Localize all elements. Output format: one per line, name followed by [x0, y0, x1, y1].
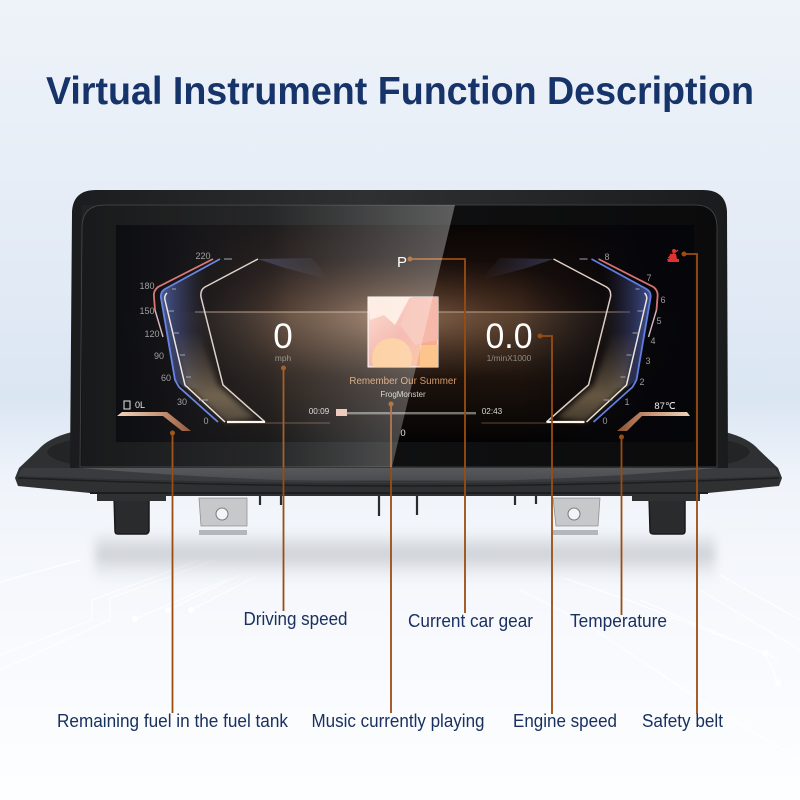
callout line: driving speed — [282, 366, 285, 611]
callout line: engine speed — [538, 334, 552, 714]
rpm scale labels — [602, 252, 666, 426]
callout line: safety belt — [682, 252, 697, 714]
rpm scale labels: 0 — [602, 416, 608, 426]
callout line: fuel — [171, 431, 174, 713]
speed scale labels: 90 — [154, 351, 164, 361]
lower trim — [15, 432, 782, 501]
rpm scale labels: 3 — [645, 356, 651, 366]
instrument screen — [116, 225, 630, 442]
rpm readout: 1/minX1000 — [487, 353, 532, 363]
speed scale labels: 30 — [177, 397, 187, 407]
callout labels: Driving speed — [244, 609, 348, 629]
music counter: 0 — [400, 428, 406, 439]
rpm scale labels: 1 — [624, 397, 630, 407]
speed readout: mph — [275, 353, 291, 363]
rpm scale labels: 8 — [604, 252, 610, 262]
callout labels: Temperature — [570, 611, 667, 631]
music progress bar: 02:43 — [482, 407, 503, 416]
callout line: temperature — [620, 435, 623, 615]
callout line: music — [389, 402, 393, 713]
mounting feet and brackets — [114, 495, 685, 535]
callout line: gear — [408, 257, 465, 613]
music progress bar — [309, 407, 503, 416]
title: Virtual Instrument Function Description — [46, 70, 754, 113]
rpm scale labels: 4 — [650, 336, 656, 346]
callout labels: Music currently playing — [312, 711, 484, 731]
speed scale labels: 220 — [195, 251, 211, 261]
icon: safety belt warning — [667, 249, 679, 262]
display bezel — [70, 190, 728, 468]
rpm readout: 0.0 — [486, 317, 532, 356]
speed readout: 0 — [273, 317, 293, 356]
rpm scale labels: 7 — [646, 273, 652, 283]
rpm scale labels: 2 — [639, 377, 645, 387]
callout labels: Safety belt — [642, 711, 723, 731]
rpm scale labels: 6 — [660, 295, 666, 305]
rpm scale labels: 5 — [656, 316, 662, 326]
album art — [368, 296, 438, 368]
callout labels: Remaining fuel in the fuel tank — [57, 711, 289, 731]
screen glass reflection — [82, 205, 455, 467]
fuel gauge — [117, 400, 191, 431]
speed scale labels: 0 — [203, 416, 209, 426]
music progress bar: 00:09 — [309, 407, 330, 416]
speed scale labels — [139, 251, 211, 426]
callout labels: Current car gear — [408, 611, 533, 631]
speed scale labels: 150 — [139, 306, 155, 316]
callout labels — [57, 609, 723, 731]
speed scale labels: 120 — [144, 329, 160, 339]
left speed gauge — [154, 258, 330, 423]
gear indicator: P — [397, 254, 407, 271]
song title and artist: FrogMonster — [380, 390, 426, 399]
right rpm gauge — [482, 258, 658, 423]
callout labels: Engine speed — [513, 711, 617, 731]
song title and artist — [349, 376, 457, 399]
fuel gauge: 0L — [135, 400, 145, 410]
product shadow reflection — [95, 534, 715, 586]
temperature gauge: 87℃ — [654, 401, 676, 412]
temperature gauge — [617, 401, 690, 431]
song title and artist: Remember Our Summer — [349, 376, 457, 387]
speed scale labels: 60 — [161, 373, 171, 383]
speed scale labels: 180 — [139, 281, 155, 291]
